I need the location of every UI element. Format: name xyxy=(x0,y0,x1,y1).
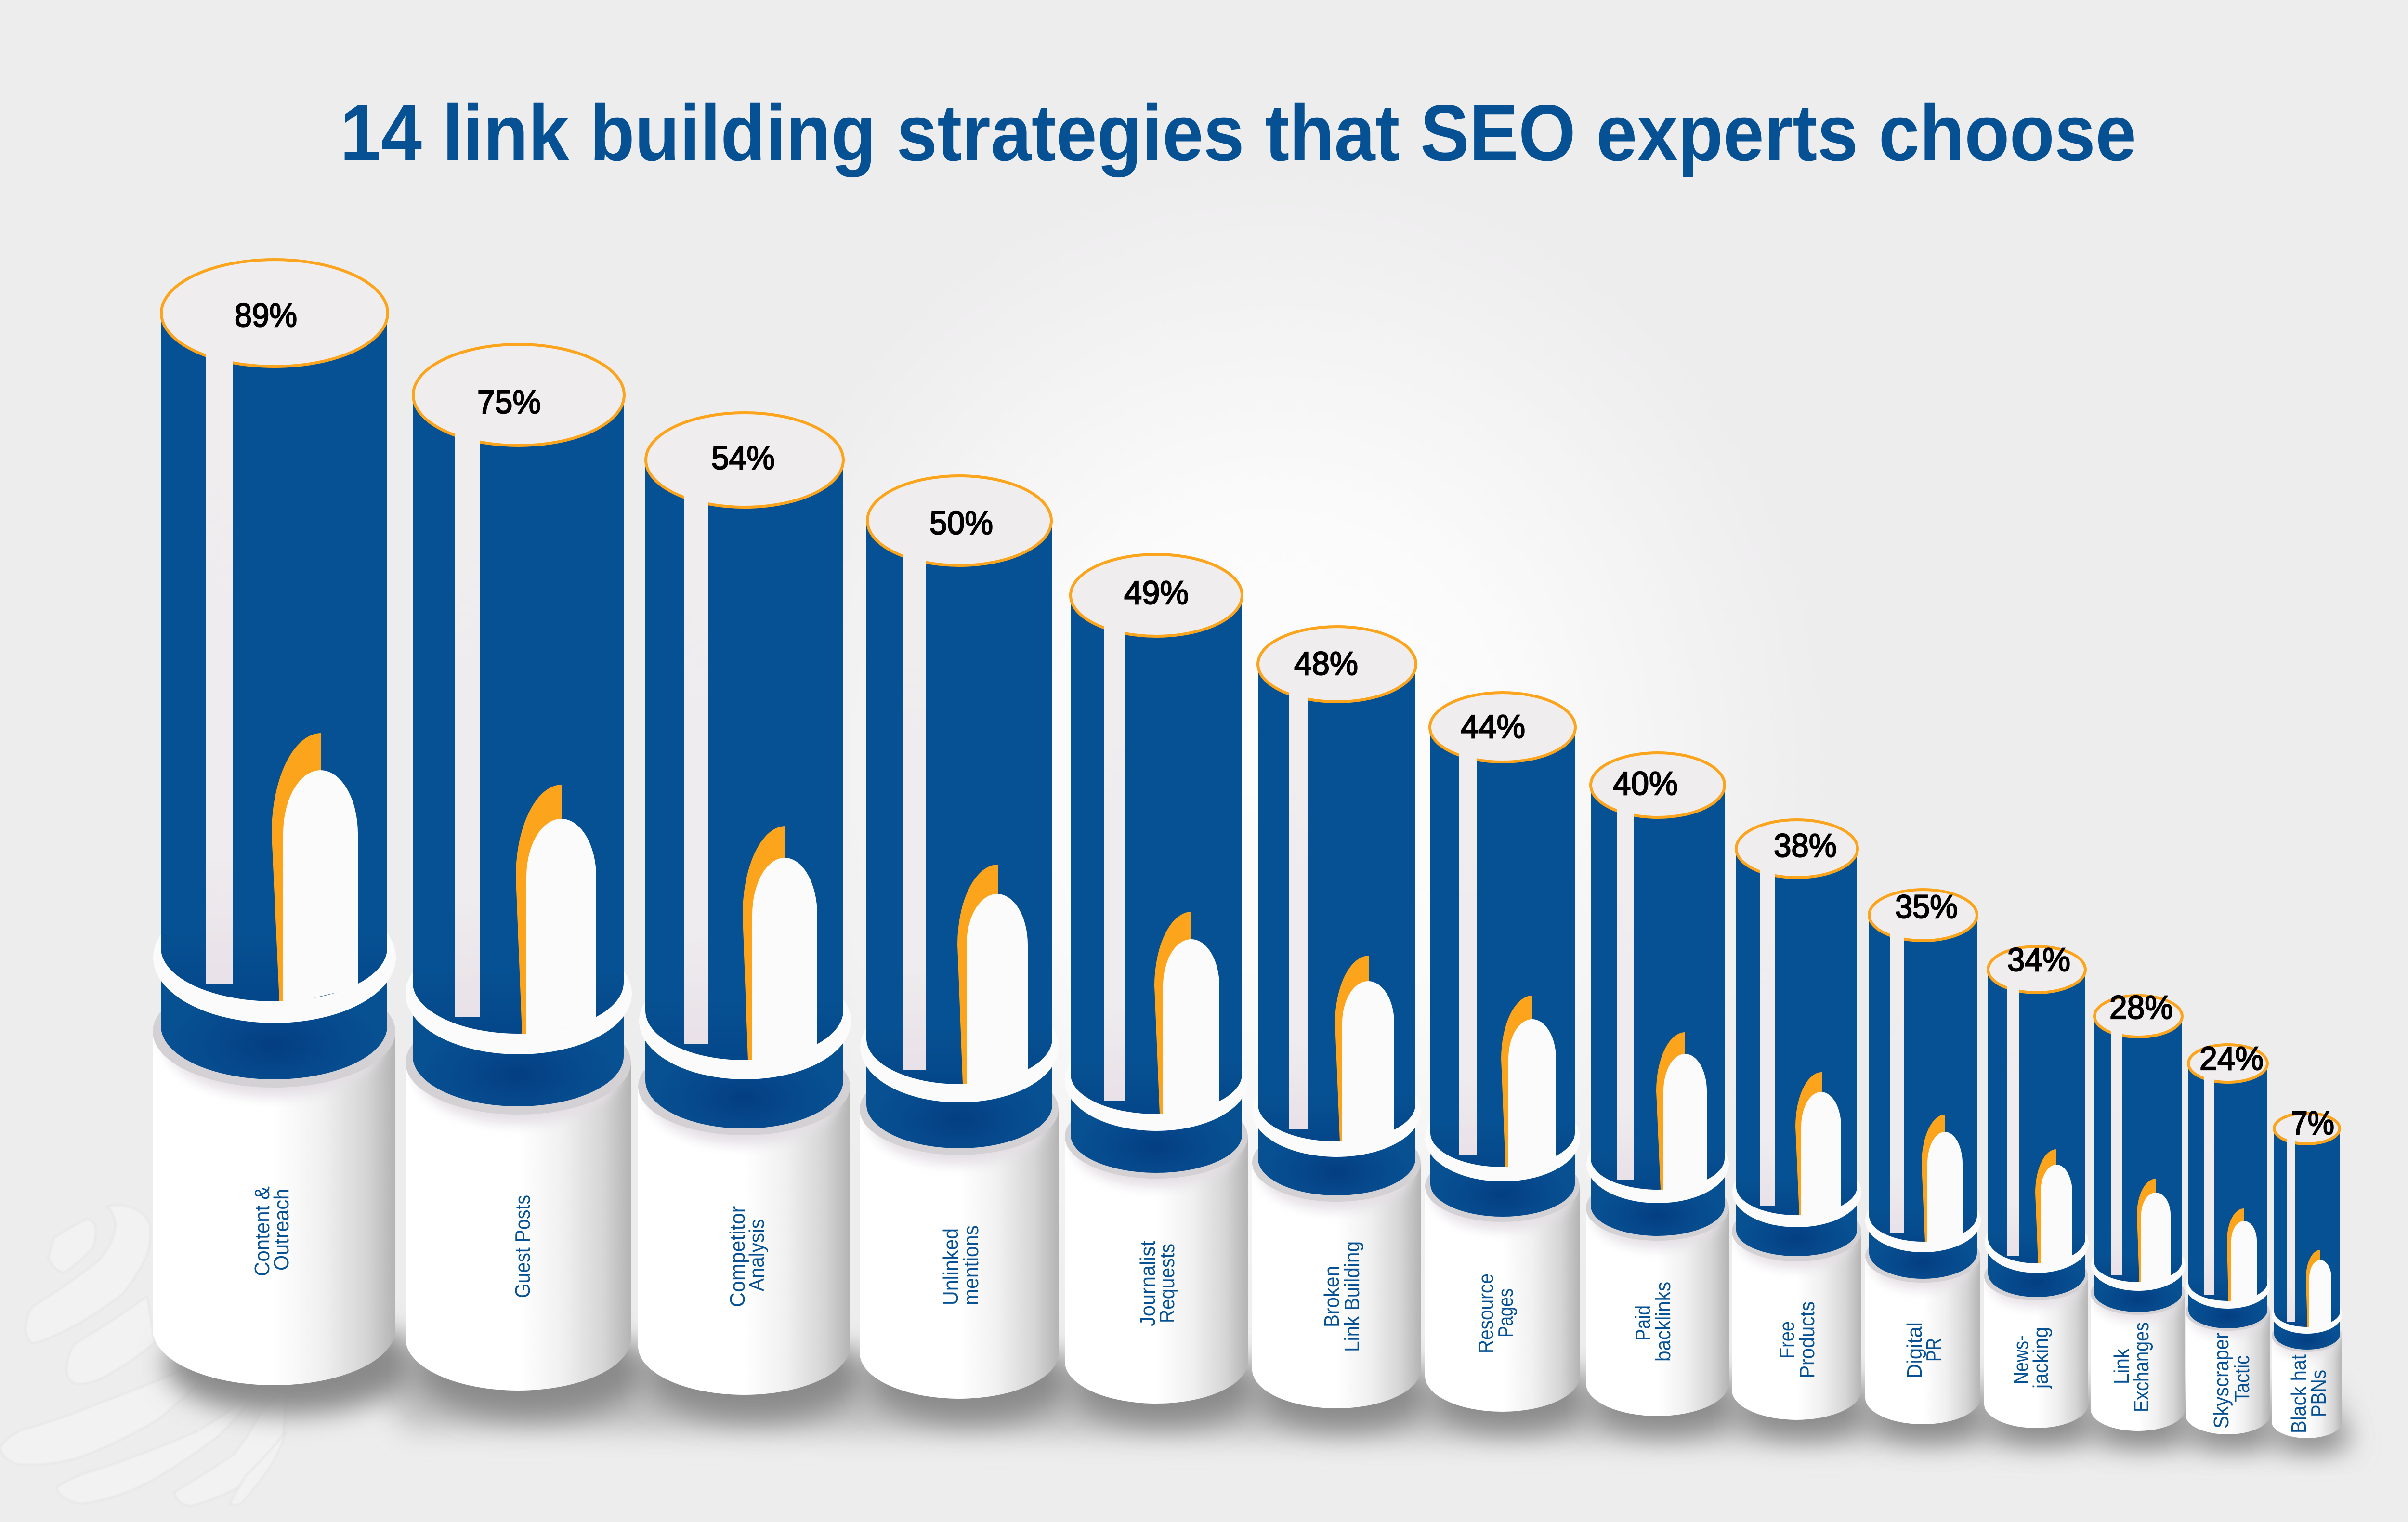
column: Link Exchanges 28% xyxy=(2091,989,2186,1431)
white base cylinder xyxy=(860,1109,1059,1399)
label: News- xyxy=(2009,1335,2033,1384)
white arch xyxy=(1342,981,1394,1145)
label: Broken xyxy=(1320,1266,1344,1327)
value: 44% xyxy=(1461,708,1525,745)
label xyxy=(1320,1241,1364,1352)
orange highlight xyxy=(1501,996,1532,1167)
orange highlight xyxy=(1922,1115,1945,1242)
value: 24% xyxy=(2199,1040,2264,1077)
light stripe xyxy=(206,337,233,984)
label xyxy=(1631,1282,1675,1362)
blue cylinder xyxy=(413,395,624,1034)
top ellipse xyxy=(1430,693,1575,762)
label xyxy=(1474,1273,1518,1353)
label: Outreach xyxy=(270,1189,293,1271)
column: Unlinked mentions 50% xyxy=(860,476,1059,1399)
label xyxy=(726,1206,769,1307)
blue cylinder xyxy=(1869,915,1977,1242)
light stripe xyxy=(2111,1028,2122,1275)
light stripe xyxy=(1104,617,1125,1101)
label xyxy=(2009,1327,2053,1390)
blue cylinder xyxy=(1988,970,2085,1263)
top ellipse xyxy=(1869,890,1977,941)
light stripe xyxy=(1289,684,1308,1129)
value: 34% xyxy=(2007,941,2070,978)
value: 35% xyxy=(1895,888,1958,925)
orange highlight xyxy=(2227,1208,2244,1301)
label: Pages xyxy=(1494,1288,1518,1338)
title: 14 link building strategies that SEO experts choose xyxy=(340,89,2136,178)
blue cylinder xyxy=(1430,727,1575,1167)
label: Free xyxy=(1775,1321,1799,1359)
blue cylinder xyxy=(1258,664,1415,1142)
label: Unlinked xyxy=(939,1228,963,1305)
label: Exchanges xyxy=(2130,1322,2153,1412)
white base cylinder xyxy=(2091,1293,2185,1431)
label: Analysis xyxy=(745,1219,769,1291)
orange highlight xyxy=(516,785,562,1034)
light stripe xyxy=(2287,1138,2295,1322)
blue cylinder xyxy=(2094,1016,2182,1282)
orange highlight xyxy=(1154,912,1191,1114)
top ellipse xyxy=(413,344,624,446)
orange highlight xyxy=(743,826,785,1060)
light stripe xyxy=(903,544,926,1070)
white base cylinder xyxy=(1732,1232,1861,1420)
label: Guest Posts xyxy=(511,1195,535,1298)
orange highlight xyxy=(2035,1149,2056,1263)
value: 7% xyxy=(2291,1104,2334,1142)
value: 40% xyxy=(1613,765,1678,802)
orange highlight xyxy=(957,865,998,1084)
label: mentions xyxy=(959,1225,983,1305)
column: Free Products 38% xyxy=(1732,820,1861,1420)
blue cylinder xyxy=(2188,1063,2267,1301)
top ellipse xyxy=(646,413,843,507)
value: 49% xyxy=(1124,574,1189,611)
label: Link xyxy=(2110,1348,2133,1384)
light stripe xyxy=(2007,983,2019,1256)
top ellipse xyxy=(161,260,388,367)
label xyxy=(1903,1322,1946,1378)
value: 54% xyxy=(711,439,775,476)
column: Broken Link Building 48% xyxy=(1252,627,1421,1408)
column: Resource Pages 44% xyxy=(1425,693,1580,1412)
label: Tactic xyxy=(2230,1355,2254,1402)
orange highlight xyxy=(1335,956,1369,1142)
white arch xyxy=(1801,1092,1841,1219)
white base cylinder xyxy=(638,1087,850,1395)
chart: 3D cylinder columns xyxy=(153,260,2342,1438)
column: Black hat PBNs 7% xyxy=(2272,1104,2342,1438)
value: 50% xyxy=(929,504,993,541)
value: 38% xyxy=(1774,827,1837,864)
orange highlight xyxy=(2306,1250,2320,1327)
label: Competitor xyxy=(726,1206,749,1307)
white arch xyxy=(1508,1019,1556,1171)
label xyxy=(1775,1301,1819,1378)
column: Content & Outreach 89% xyxy=(153,260,396,1385)
light stripe xyxy=(455,419,480,1017)
label xyxy=(2210,1333,2254,1429)
label: Requests xyxy=(1155,1244,1179,1323)
label: Paid xyxy=(1631,1305,1655,1341)
light stripe xyxy=(1617,802,1634,1180)
label xyxy=(2287,1354,2330,1433)
light stripe xyxy=(1760,865,1775,1206)
label xyxy=(1136,1241,1179,1326)
orange highlight xyxy=(1795,1072,1822,1215)
top ellipse xyxy=(1071,554,1242,636)
white base cylinder xyxy=(2186,1312,2270,1434)
white arch xyxy=(2309,1260,2331,1331)
blue cylinder xyxy=(1071,595,1242,1114)
white arch xyxy=(1663,1054,1707,1194)
white base cylinder xyxy=(1586,1208,1729,1416)
label xyxy=(2110,1322,2153,1412)
icon: faint watermark swirl xyxy=(0,1205,286,1506)
orange highlight xyxy=(272,733,321,1001)
blue cylinder xyxy=(645,460,843,1060)
column: Paid backlinks 40% xyxy=(1586,753,1729,1416)
orange highlight xyxy=(2137,1179,2156,1282)
light stripe xyxy=(1459,747,1477,1155)
white base cylinder xyxy=(1065,1137,1248,1404)
top ellipse xyxy=(2274,1113,2340,1144)
value: 89% xyxy=(235,297,297,334)
value: 75% xyxy=(477,383,541,420)
blue cylinder xyxy=(1736,849,1857,1215)
column: News-jacking 34% xyxy=(1984,941,2089,1428)
column: Competitor Analysis 54% xyxy=(638,413,851,1395)
label xyxy=(250,1186,293,1276)
white arch xyxy=(752,858,817,1064)
light stripe xyxy=(2204,1074,2214,1295)
column: Journalist Requests 49% xyxy=(1065,554,1248,1404)
white arch xyxy=(526,819,596,1037)
top ellipse xyxy=(1736,820,1858,878)
top ellipse xyxy=(2188,1045,2267,1082)
label: jacking xyxy=(2029,1327,2053,1390)
value: 28% xyxy=(2109,989,2173,1026)
label: backlinks xyxy=(1651,1282,1675,1362)
column: Skyscraper Tactic 24% xyxy=(2186,1040,2270,1434)
column: Digital PR 35% xyxy=(1865,888,1981,1424)
label xyxy=(939,1225,983,1305)
blue cylinder xyxy=(2274,1128,2340,1327)
column: Guest Posts 75% xyxy=(406,344,632,1391)
label: Products xyxy=(1795,1301,1819,1378)
white base cylinder xyxy=(406,1063,631,1391)
light stripe xyxy=(684,484,708,1044)
top ellipse xyxy=(2094,996,2182,1037)
label: Digital xyxy=(1903,1322,1926,1378)
white base cylinder xyxy=(1984,1276,2088,1428)
top ellipse xyxy=(1258,627,1416,702)
label: Content & xyxy=(250,1186,274,1276)
white base cylinder xyxy=(153,1032,395,1385)
white arch xyxy=(283,770,358,1005)
label: PBNs xyxy=(2307,1370,2330,1417)
floor shadow xyxy=(166,1313,2350,1451)
white arch xyxy=(2141,1193,2171,1286)
label: Skyscraper xyxy=(2210,1333,2233,1429)
label: Journalist xyxy=(1136,1241,1160,1326)
label: Black hat xyxy=(2287,1354,2311,1433)
top ellipse xyxy=(867,476,1051,565)
white base cylinder xyxy=(2272,1336,2342,1438)
label: Link Building xyxy=(1340,1241,1364,1352)
blue cylinder xyxy=(161,313,387,1001)
blue cylinder xyxy=(1591,785,1725,1190)
top ellipse xyxy=(1988,946,2085,993)
white arch xyxy=(1163,939,1219,1118)
white arch xyxy=(967,894,1028,1088)
label: Resource xyxy=(1474,1273,1498,1353)
white base cylinder xyxy=(1425,1186,1580,1412)
light stripe xyxy=(1890,930,1904,1233)
white base cylinder xyxy=(1252,1163,1421,1408)
white arch xyxy=(2231,1221,2257,1305)
value: 48% xyxy=(1294,645,1358,682)
white arch xyxy=(2041,1165,2072,1267)
orange highlight xyxy=(1656,1032,1685,1190)
top ellipse xyxy=(1591,753,1725,817)
label: PR xyxy=(1922,1338,1946,1362)
white base cylinder xyxy=(1865,1256,1980,1424)
white arch xyxy=(1927,1132,1963,1246)
blue cylinder xyxy=(866,521,1052,1084)
